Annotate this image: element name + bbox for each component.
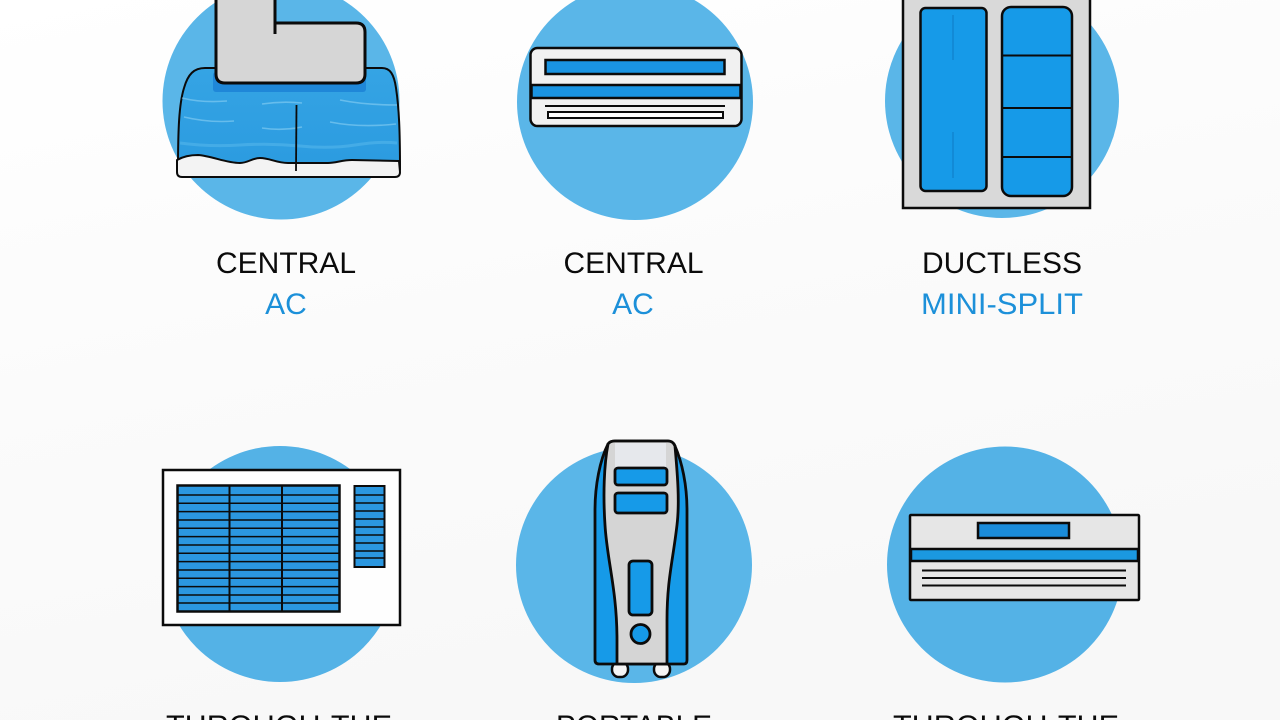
icon: central AC body bbox=[177, 0, 400, 177]
icon: window unit body bbox=[163, 470, 400, 625]
icon: slim unit circle bbox=[887, 446, 1123, 682]
icon: wall unit body bbox=[530, 48, 742, 126]
heading: central AC label bbox=[216, 247, 356, 321]
icon: wall unit circle bbox=[517, 0, 753, 220]
icon: slim unit body bbox=[910, 515, 1139, 600]
icon: central AC circle bbox=[162, 0, 400, 220]
heading: central AC label: AC bbox=[265, 288, 307, 321]
panel: central AC outdoor unit bbox=[162, 0, 400, 220]
panel: ductless mini-split bbox=[885, 0, 1119, 218]
heading: second central AC label bbox=[563, 247, 704, 321]
heading: central AC label: CENTRAL bbox=[216, 247, 356, 280]
icon: portable unit bbox=[595, 441, 687, 677]
panel: through-the-wall window unit bbox=[162, 446, 400, 682]
heading: ductless mini-split label: MINI-SPLIT bbox=[921, 288, 1083, 321]
panel: through-the-wall slim unit bbox=[887, 446, 1139, 682]
heading: ductless mini-split label: DUCTLESS bbox=[922, 247, 1082, 280]
icon: mini-split circle bbox=[885, 0, 1119, 218]
icon: portable circle bbox=[516, 447, 752, 683]
heading: second central AC label: CENTRAL bbox=[563, 247, 704, 280]
heading: ductless mini-split label bbox=[921, 247, 1083, 321]
panel: central AC wall unit bbox=[517, 0, 753, 220]
heading: second central AC label: AC bbox=[612, 288, 654, 321]
icon: mini-split unit bbox=[903, 0, 1090, 208]
icon: window unit circle bbox=[162, 446, 398, 682]
panel: portable AC bbox=[516, 441, 752, 683]
